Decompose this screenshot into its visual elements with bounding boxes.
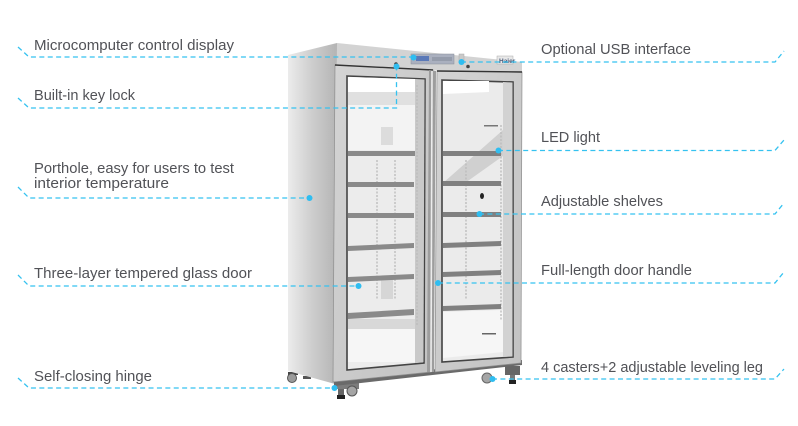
callout: casters and leveling leg: 4 casters+2 adjustable leveling leg [541, 360, 763, 376]
callout: LED light: LED light [541, 130, 600, 146]
brand badge: Haier [499, 58, 516, 65]
callout: Self-closing hinge: Self-closing hinge [34, 369, 152, 385]
callout: LED light [496, 130, 784, 154]
left door shelves [348, 151, 415, 319]
callout: Adjustable shelves: Adjustable shelves [541, 194, 663, 210]
cabinet side panel [288, 43, 337, 384]
door handle [427, 70, 436, 372]
right door racks [466, 125, 501, 320]
left door glass [347, 76, 425, 370]
left door racks [377, 85, 417, 325]
callout: Built-in key lock: Built-in key lock [34, 88, 136, 104]
control display [411, 54, 454, 64]
callout: Self-closing hinge [18, 369, 338, 391]
left door [333, 65, 433, 382]
right door [435, 71, 522, 372]
key locks [394, 62, 470, 68]
callout: Built-in key lock [18, 64, 400, 108]
casters and leveling feet [288, 366, 520, 399]
callout: Porthole [18, 161, 312, 201]
callout: Full-length door handle: Full-length door handle [541, 263, 692, 279]
callout: Microcomputer control display [18, 38, 416, 60]
porthole [480, 193, 484, 199]
cabinet top fascia [337, 43, 522, 75]
callout: Optional USB interface: Optional USB interface [541, 42, 691, 58]
callout: Three-layer tempered glass door: Three-layer tempered glass door [34, 266, 252, 282]
USB interface [459, 54, 464, 63]
callout: Microcomputer control display: Microcomputer control display [34, 38, 235, 54]
right door glass [442, 80, 513, 362]
base strip [334, 360, 522, 386]
callout: Porthole: interior temperature [34, 176, 169, 192]
callout: Three-layer tempered glass door [18, 266, 362, 289]
callout: casters and leveling leg [490, 360, 784, 382]
callout: Full-length door handle [435, 263, 784, 286]
callout: Optional USB interface [458, 42, 784, 65]
right door shelves [443, 151, 501, 311]
brand badge [497, 56, 516, 65]
callout: Porthole: Porthole, easy for users to test [34, 161, 234, 177]
refrigerator [288, 43, 522, 399]
callout: Adjustable shelves [476, 194, 784, 217]
